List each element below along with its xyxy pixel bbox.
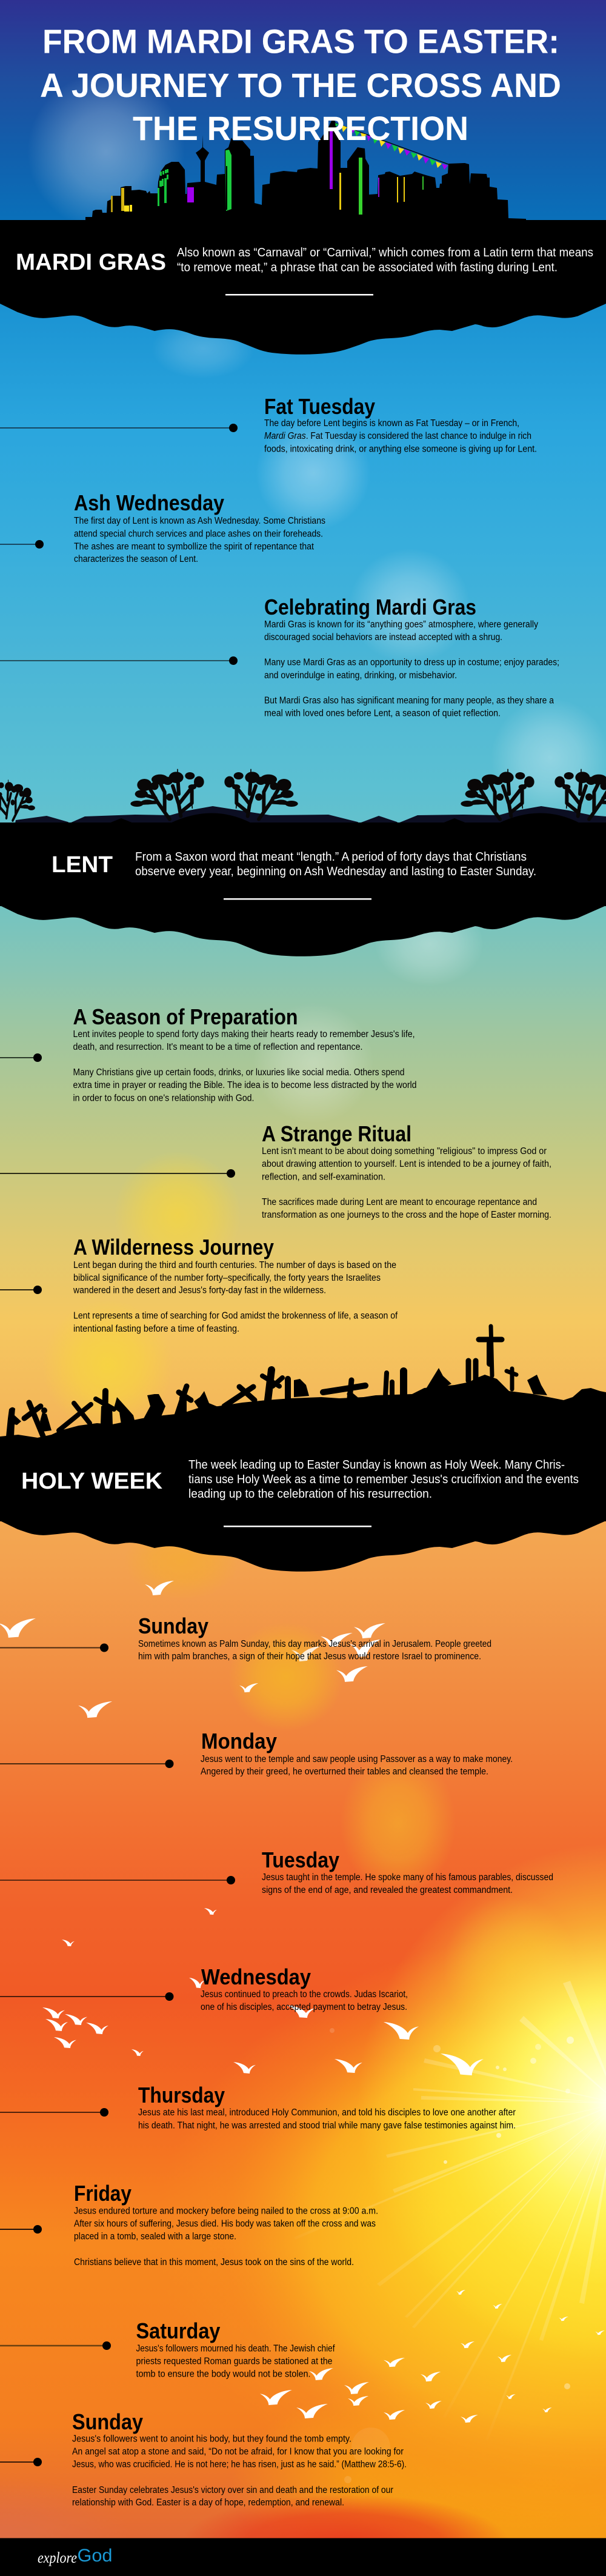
text: Friday body: Jesus endured torture and mockery before being nailed to the cross at 9:00 a.m. <box>74 2206 378 2216</box>
text: Easter Sunday body <box>72 2434 407 2508</box>
panel: Friday <box>0 2181 378 2267</box>
text: Holy Week definition: The week leading up to Easter Sunday is known as Holy Week. Many Chris- <box>188 1458 565 1472</box>
text: Friday body: After six hours of suffering, Jesus died. His body was taken off the cross and was <box>74 2219 376 2229</box>
text: Wednesday body <box>201 1989 408 2012</box>
text: Friday body: placed in a tomb, sealed with a large stone. <box>74 2232 236 2242</box>
text: A Strange Ritual body <box>262 1146 551 1220</box>
text: A Wilderness Journey body: wandered in the desert and Jesus's forty-day fast in the wilderness. <box>73 1286 326 1296</box>
footer <box>0 2538 606 2576</box>
soft glows <box>27 73 606 2036</box>
text: Easter Sunday body: relationship with God. Easter is a day of hope, redemption, and renewal. <box>72 2497 344 2508</box>
sunburst <box>0 1843 606 2576</box>
heading: Celebrating Mardi Gras: Celebrating Mardi Gras <box>264 595 476 619</box>
text: Tuesday body: signs of the end of age, and revealed the greatest commandment. <box>262 1885 513 1895</box>
text: Celebrating Mardi Gras body: and overindulge in eating, drinking, or misbehavior. <box>264 670 457 681</box>
text: Lent definition: From a Saxon word that meant “length.” A period of forty days that Christians <box>135 850 527 864</box>
text: Fat Tuesday body: The day before Lent begins is known as Fat Tuesday – or in French, <box>264 418 519 429</box>
text: Fat Tuesday body: Mardi Gras. Fat Tuesday is considered the last chance to indulge in rich <box>264 431 531 441</box>
text: A Season of Preparation body: Many Christians give up certain foods, drinks, or luxuries like social media. Others spend <box>73 1067 405 1078</box>
panel: A Wilderness Journey <box>0 1235 398 1334</box>
text: Ash Wednesday body <box>74 516 325 564</box>
text: Friday body <box>74 2206 378 2267</box>
text: Saturday body: priests requested Roman guards be stationed at the <box>136 2357 332 2367</box>
text: Mardi Gras definition: “to remove meat,” a phrase that can be associated with fasting during Lent. <box>177 261 558 274</box>
text: Ash Wednesday body: attend special church services and place ashes on their foreheads. <box>74 529 323 539</box>
desert trees and hills <box>0 769 606 823</box>
text: Fat Tuesday body: foods, intoxicating drink, or anything else someone is giving up for Lent. <box>264 444 537 455</box>
text: A Strange Ritual body: about drawing attention to yourself. Lent is intended to be a journey of faith, <box>262 1159 551 1169</box>
panel: Thursday <box>0 2083 516 2131</box>
panel: Monday <box>0 1729 513 1777</box>
text: A Wilderness Journey body: intentional fasting before a time of feasting. <box>73 1324 239 1334</box>
text: Easter Sunday body: Easter Sunday celebrates Jesus's victory over sin and death and the restoration of our <box>72 2485 393 2495</box>
title <box>40 22 561 147</box>
text: Thursday body <box>138 2107 516 2131</box>
heading: Tuesday: Tuesday <box>262 1847 339 1872</box>
heading: A Strange Ritual: A Strange Ritual <box>262 1121 411 1146</box>
text: Sunday body <box>138 1639 491 1662</box>
city skyline with Mardi Gras lights <box>79 119 526 220</box>
heading: Monday: Monday <box>201 1729 277 1753</box>
text: Celebrating Mardi Gras body: But Mardi Gras also has significant meaning for many people, as they share a <box>264 696 554 706</box>
logo: explore God <box>38 2546 113 2566</box>
text: Easter Sunday body: Jesus, who was crucificied. He is not here; he has risen, just as he said.” (Matthew 28:5-6). <box>72 2460 407 2470</box>
panel: Lent banner <box>0 823 606 956</box>
text: A Strange Ritual body: transformation as one journeys to the cross and the hope of Easter morning. <box>262 1210 551 1220</box>
text: Monday body: Angered by their greed, he overturned their tables and cleansed the temple. <box>201 1766 488 1777</box>
heading: A Wilderness Journey: A Wilderness Journey <box>73 1235 274 1260</box>
text: Lent definition <box>135 850 536 878</box>
text: Holy Week definition: tians use Holy Week as a time to remember Jesus's crucifixion and the events <box>188 1473 579 1486</box>
text: Celebrating Mardi Gras body <box>264 619 559 719</box>
text: Wednesday body: Jesus continued to preach to the crowds. Judas Iscariot, <box>201 1989 408 2000</box>
heading: Sunday: Sunday <box>138 1613 208 1638</box>
title: A JOURNEY TO THE CROSS AND <box>40 66 561 104</box>
panel: Easter Sunday <box>0 2409 407 2508</box>
text: Monday body: Jesus went to the temple and saw people using Passover as a way to make money. <box>201 1754 513 1764</box>
panel: Wednesday <box>0 1964 408 2012</box>
heading: Saturday: Saturday <box>136 2318 221 2343</box>
text: Fat Tuesday body <box>264 418 537 455</box>
text: A Season of Preparation body: Lent invites people to spend forty days making their hearts ready to remember Jesus's life, <box>73 1029 415 1039</box>
text: A Wilderness Journey body: biblical significance of the number forty–specifically, the forty years the Israelites <box>73 1273 381 1283</box>
text: A Wilderness Journey body: Lent began during the third and fourth centuries. The number of days is based on the <box>73 1260 396 1270</box>
text: Holy Week definition <box>188 1458 579 1501</box>
white birds <box>0 1581 605 2423</box>
text: Celebrating Mardi Gras body: Mardi Gras is known for its “anything goes” atmosphere, where generally <box>264 619 538 630</box>
text: Holy Week definition: leading up to the celebration of his resurrection. <box>188 1487 432 1501</box>
panel: Holy Week banner <box>0 1326 606 1572</box>
text: A Wilderness Journey body <box>73 1260 398 1334</box>
heading: Fat Tuesday: Fat Tuesday <box>264 394 375 419</box>
text: Saturday body: Jesus's followers mourned his death. The Jewish chief <box>136 2344 335 2354</box>
text: A Wilderness Journey body: Lent represents a time of searching for God amidst the brokenness of life, a season of <box>73 1311 398 1321</box>
text: Wednesday body: one of his disciples, accepted payment to betray Jesus. <box>201 2002 407 2012</box>
heading: Lent: LENT <box>52 852 113 878</box>
title: FROM MARDI GRAS TO EASTER: <box>42 22 559 61</box>
text: Ash Wednesday body: characterizes the season of Lent. <box>74 554 198 564</box>
text: Monday body <box>201 1754 513 1777</box>
text: Thursday body: Jesus ate his last meal, introduced Holy Communion, and told his disciples to love one another after <box>138 2107 516 2118</box>
text: Thursday body: his death. That night, he was arrested and stood trial while many gave false testimonies against him. <box>138 2120 516 2131</box>
panel: Tuesday <box>0 1847 553 1895</box>
panel: A Season of Preparation <box>0 1004 417 1103</box>
text: A Season of Preparation body: in order to focus on one's relationship with God. <box>73 1093 255 1103</box>
text: Celebrating Mardi Gras body: meal with loved ones before Lent, a season of quiet reflection. <box>264 709 501 719</box>
text: A Season of Preparation body: extra time in prayer or reading the Bible. The idea is to become less distracted by the world <box>73 1080 417 1090</box>
title: THE RESURRECTION <box>133 109 468 147</box>
text: Mardi Gras definition <box>177 246 593 274</box>
text: Tuesday body: Jesus taught in the temple. He spoke many of his famous parables, discussed <box>262 1872 553 1883</box>
text: Ash Wednesday body: The ashes are meant to symbollize the spirit of repentance that <box>74 542 315 552</box>
heading: Wednesday: Wednesday <box>201 1964 311 1989</box>
text: A Strange Ritual body: reflection, and self-examination. <box>262 1172 385 1182</box>
Calvary hill with figures <box>0 1326 606 1455</box>
text: Sunday body: Sometimes known as Palm Sunday, this day marks Jesus's arrival in Jerusalem. People greeted <box>138 1639 491 1649</box>
logo: explore God: God <box>78 2546 113 2566</box>
panel: Mardi Gras banner <box>0 220 606 355</box>
icon: bunting <box>335 123 448 170</box>
text: A Season of Preparation body: death, and resurrection. It's meant to be a time of reflection and repentance. <box>73 1042 362 1052</box>
text: Tuesday body <box>262 1872 553 1895</box>
text: Celebrating Mardi Gras body: discouraged social behaviors are instead accepted with a shrug. <box>264 632 502 642</box>
heading: Holy Week: HOLY WEEK <box>21 1469 163 1494</box>
text: Sunday body: him with palm branches, a sign of their hope that Jesus would restore Israel to prominence. <box>138 1651 481 1662</box>
text: Ash Wednesday body: The first day of Lent is known as Ash Wednesday. Some Christians <box>74 516 325 526</box>
panel: Fat Tuesday <box>0 394 537 455</box>
panel: Celebrating Mardi Gras <box>0 595 559 719</box>
heading: Mardi Gras: MARDI GRAS <box>16 250 166 275</box>
text: Lent definition: observe every year, beginning on Ash Wednesday and lasting to Easter Sunday. <box>135 865 536 878</box>
logo: explore God: explore <box>38 2550 77 2566</box>
text: Friday body: Christians believe that in this moment, Jesus took on the sins of the world. <box>74 2257 354 2267</box>
heading: Sunday: Sunday <box>72 2409 143 2434</box>
text: Saturday body: tomb to ensure the body would not be stolen. <box>136 2369 310 2380</box>
heading: Thursday: Thursday <box>138 2083 225 2107</box>
heading: Friday: Friday <box>74 2181 132 2206</box>
text: A Season of Preparation body <box>73 1029 417 1103</box>
text: Saturday body <box>136 2344 335 2380</box>
heading: A Season of Preparation: A Season of Preparation <box>73 1004 298 1029</box>
panel: Ash Wednesday <box>0 490 325 564</box>
panel: A Strange Ritual <box>0 1121 551 1220</box>
panel: Palm Sunday <box>0 1613 491 1662</box>
text: Easter Sunday body: Jesus's followers went to anoint his body, but they found the tomb empty. <box>72 2434 351 2444</box>
text: A Strange Ritual body: The sacrifices made during Lent are meant to encourage repentance and <box>262 1197 537 1207</box>
text: Celebrating Mardi Gras body: Many use Mardi Gras as an opportunity to dress up in costume; enjoy parades; <box>264 658 559 668</box>
panel: Saturday <box>0 2318 335 2380</box>
heading: Ash Wednesday: Ash Wednesday <box>74 490 224 515</box>
text: Easter Sunday body: An angel sat atop a stone and said, “Do not be afraid, for I know that you are looking for <box>72 2447 404 2457</box>
text: A Strange Ritual body: Lent isn't meant to be about doing something "religious" to impress God or <box>262 1146 547 1156</box>
